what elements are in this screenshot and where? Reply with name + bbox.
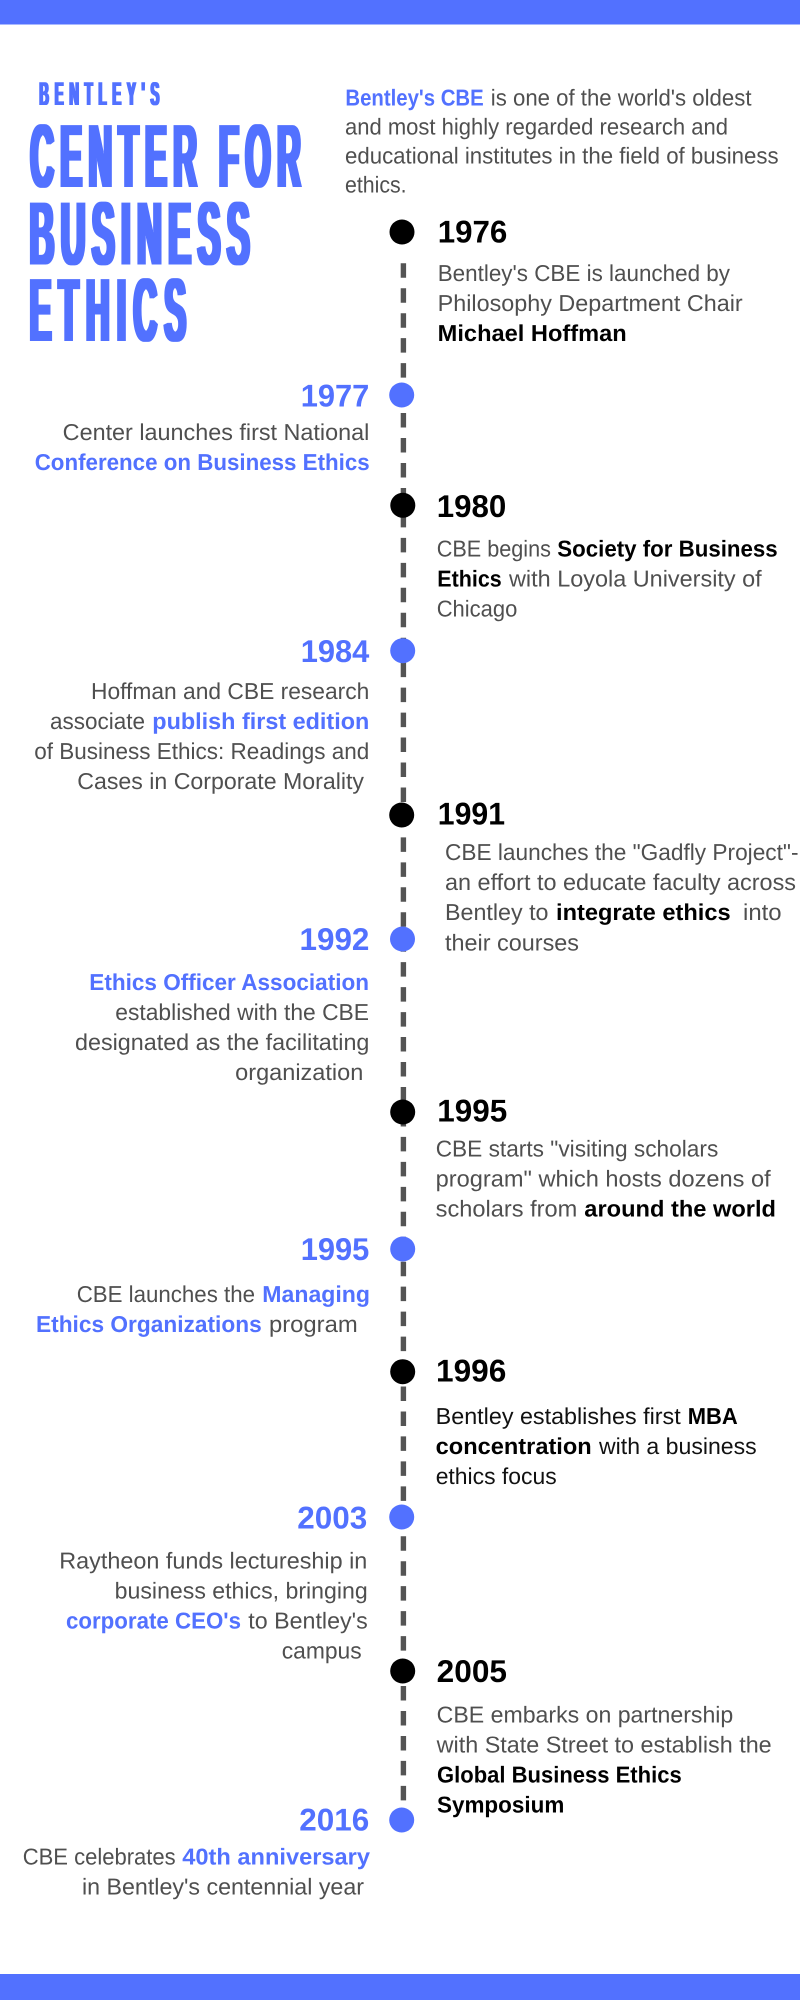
description 1991: CBE launches the "Gadfly Project"- — [445, 839, 798, 865]
intro paragraph: is one of the world's oldest — [491, 84, 752, 110]
description 1980: Chicago — [437, 596, 517, 622]
description 1980: with Loyola University of — [508, 566, 762, 592]
title: Center for Business Ethics: CENTER FOR — [30, 107, 307, 207]
description 1995 left: Ethics Organizations — [36, 1311, 262, 1337]
description 1977 — [35, 419, 370, 475]
description 1976: Philosophy Department Chair — [438, 290, 743, 316]
description 1995 left: Managing — [262, 1281, 370, 1307]
dot: 1976 — [390, 220, 414, 244]
event: 1980 — [437, 488, 778, 622]
description 1991: Bentley to — [445, 899, 548, 925]
description 1992: Ethics Officer Association — [89, 969, 369, 995]
event: 1976 — [438, 214, 743, 346]
bottom blue bar — [0, 1974, 800, 2000]
description 1984: Hoffman and CBE research — [91, 678, 369, 704]
description 1984: publish first edition — [152, 708, 369, 734]
description 1976: Bentley's CBE is launched by — [438, 260, 730, 286]
event: 1996 — [436, 1353, 757, 1489]
description 1995 left — [36, 1281, 370, 1337]
intro paragraph: ethics. — [345, 171, 407, 197]
dot: 1977 — [389, 382, 414, 408]
event: 2003 — [59, 1500, 368, 1664]
description 1995 left: program — [269, 1311, 358, 1337]
description 1984: Cases in Corporate Morality — [77, 768, 364, 794]
top blue bar — [0, 0, 800, 24]
description 2003: to Bentley's — [248, 1608, 368, 1634]
description 1996 — [436, 1403, 757, 1489]
description 1996: MBA — [688, 1403, 738, 1429]
year 1991: 1991 — [438, 795, 505, 831]
description 1976: Michael Hoffman — [438, 320, 627, 346]
description 1977: Center launches first National — [63, 419, 369, 445]
year 2005: 2005 — [437, 1653, 507, 1689]
description 2003: business ethics, bringing — [115, 1578, 368, 1604]
dot: 1995 black — [390, 1100, 415, 1124]
description 1984: associate — [50, 708, 145, 734]
description 2003: Raytheon funds lectureship in — [59, 1548, 367, 1574]
timeline dashed line — [401, 263, 406, 1801]
description 2005: Symposium — [437, 1791, 564, 1817]
title: Bentley's: BENTLEY'S — [39, 75, 165, 112]
year 2003: 2003 — [297, 1500, 367, 1536]
description 2003: corporate CEO's — [66, 1608, 241, 1634]
year 1995: 1995 — [301, 1231, 369, 1267]
year 1977: 1977 — [301, 378, 369, 414]
description 2005 — [436, 1701, 772, 1817]
description 1996: concentration — [436, 1433, 592, 1459]
description 2005: Global Business Ethics — [437, 1761, 682, 1787]
event: 1991 — [438, 795, 798, 956]
year 2016: 2016 — [299, 1802, 369, 1838]
description 1992: organization — [235, 1059, 363, 1085]
description 1992: designated as the facilitating — [75, 1029, 369, 1055]
dot: 1980 — [390, 493, 415, 518]
event: 1992 — [75, 921, 369, 1085]
title: Center for Business Ethics: ETHICS — [30, 261, 193, 361]
title: Center for Business Ethics: BUSINESS — [30, 184, 256, 284]
description 2016: 40th anniversary — [182, 1844, 370, 1870]
dot: 1991 — [389, 802, 414, 828]
description 1992 — [75, 969, 369, 1085]
year 1980: 1980 — [437, 488, 506, 524]
year 1996: 1996 — [436, 1353, 506, 1389]
intro paragraph: and most highly regarded research and — [345, 113, 728, 139]
description 1980: Ethics — [437, 566, 502, 592]
intro paragraph — [345, 84, 779, 197]
description 2016: in Bentley's centennial year — [82, 1874, 364, 1900]
timeline dots — [389, 220, 415, 1832]
description 2016: CBE celebrates — [23, 1844, 176, 1870]
description 1995 left: CBE launches the — [77, 1281, 255, 1307]
description 1995 right: around the world — [584, 1196, 776, 1222]
description 1980 — [437, 536, 778, 622]
description 2003: campus — [282, 1638, 362, 1664]
description 2016 — [23, 1844, 370, 1900]
dot: 1992 — [390, 926, 415, 952]
description 1991 — [445, 839, 798, 956]
description 2003 — [59, 1548, 368, 1664]
year 1995: 1995 — [437, 1093, 507, 1129]
event: 1984 — [34, 633, 370, 794]
title: Center for Business Ethics — [30, 107, 307, 361]
intro paragraph: Bentley's CBE — [345, 84, 484, 110]
dot: 1995 blue — [390, 1236, 415, 1262]
description 1996: with a business — [598, 1433, 757, 1459]
description 1995 right: CBE starts "visiting scholars — [436, 1136, 718, 1162]
description 1991: their courses — [445, 930, 579, 956]
event: 2016 — [23, 1802, 370, 1900]
dot: 2003 — [389, 1504, 414, 1530]
description 1991: into — [743, 899, 782, 925]
description 1984: of Business Ethics: Readings and — [34, 738, 369, 764]
event: 1995 left — [36, 1231, 370, 1337]
description 2005: with State Street to establish the — [436, 1731, 772, 1757]
description 1992: established with the CBE — [115, 999, 369, 1025]
dot: 2005 — [390, 1658, 415, 1684]
description 1977: Conference on Business Ethics — [35, 449, 370, 475]
dot: 1984 — [390, 638, 415, 663]
description 2005: CBE embarks on partnership — [437, 1701, 733, 1727]
event: 1995 right — [436, 1093, 776, 1222]
year 1976: 1976 — [438, 214, 507, 250]
dot: 2016 — [389, 1808, 414, 1832]
description 1995 right — [436, 1136, 776, 1222]
year 1984: 1984 — [301, 633, 370, 669]
year 1992: 1992 — [300, 921, 369, 957]
description 1980: CBE begins — [437, 536, 551, 562]
description 1980: Society for Business — [557, 536, 778, 562]
event: 1977 — [35, 378, 370, 475]
event: 2005 — [436, 1653, 772, 1817]
description 1976 — [438, 260, 743, 346]
description 1991: integrate ethics — [556, 899, 731, 925]
description 1984 — [34, 678, 369, 794]
description 1991: an effort to educate faculty across — [445, 869, 796, 895]
description 1996: ethics focus — [436, 1463, 557, 1489]
dot: 1996 — [390, 1359, 415, 1384]
description 1995 right: program" which hosts dozens of — [436, 1166, 771, 1192]
description 1996: Bentley establishes first — [436, 1403, 681, 1429]
title block — [30, 75, 307, 361]
intro paragraph: educational institutes in the field of business — [345, 142, 779, 168]
description 1995 right: scholars from — [436, 1196, 577, 1222]
